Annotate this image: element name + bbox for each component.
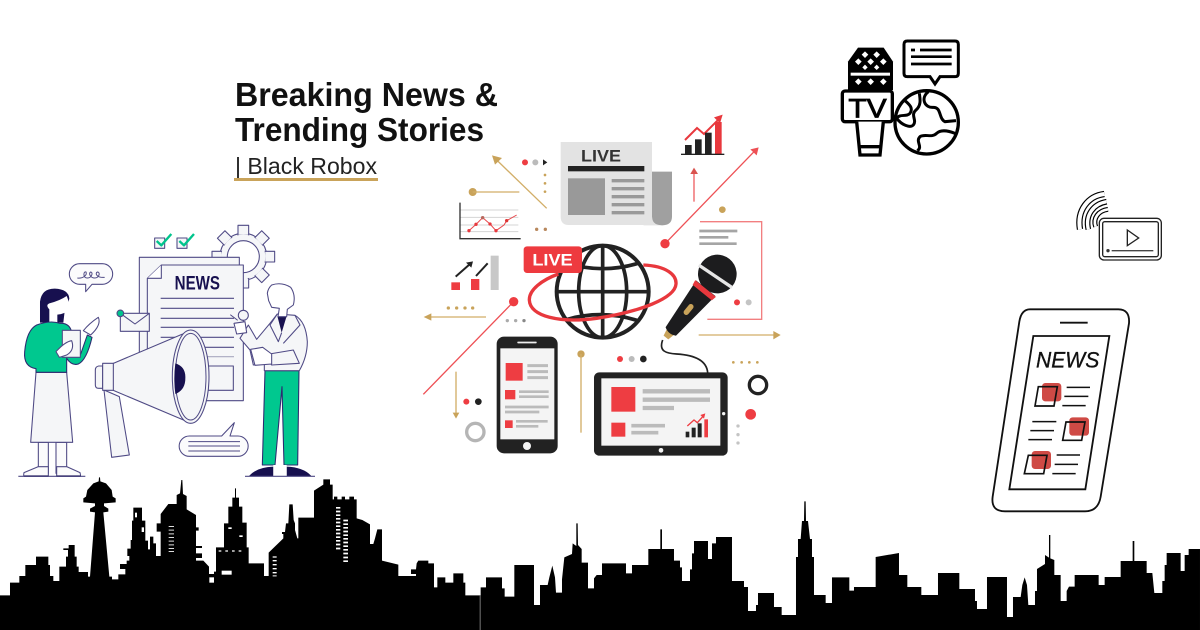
speech bubble bottom bbox=[179, 423, 248, 456]
NEWS heading: NEWS bbox=[175, 274, 220, 295]
skyline seam bbox=[480, 595, 481, 630]
heading line 1: Breaking News & bbox=[235, 76, 498, 113]
icon: smartphone with news bbox=[992, 309, 1129, 511]
line chart bbox=[460, 203, 521, 239]
icon: mic head bbox=[848, 48, 893, 90]
connector arrows and dots bbox=[423, 147, 781, 445]
icon: globe with red orbit bbox=[529, 246, 676, 338]
icon: gear bbox=[212, 225, 275, 288]
icon: small trend arrows bbox=[451, 256, 499, 290]
icon: megaphone bbox=[95, 330, 209, 457]
phone speaker bbox=[1060, 320, 1088, 325]
skyline windows bbox=[135, 507, 348, 583]
back document bbox=[139, 257, 239, 391]
microphone cable bbox=[661, 340, 708, 373]
NEWS headline: NEWS bbox=[1036, 348, 1100, 373]
icon: globe bbox=[895, 91, 958, 154]
news document bbox=[147, 265, 243, 401]
document outline with text lines bbox=[699, 222, 762, 319]
speech bubble top bbox=[69, 264, 113, 292]
icon: TV microphone, speech bubble and globe bbox=[842, 41, 958, 155]
phone device bbox=[497, 337, 558, 453]
title block bbox=[234, 76, 498, 181]
signal arcs bbox=[1079, 194, 1108, 229]
tablet device bbox=[594, 372, 728, 456]
subtitle underline bbox=[234, 178, 378, 181]
phone screen bbox=[1009, 336, 1109, 489]
icon: wireless video player bbox=[1079, 194, 1161, 260]
illustration: news team with megaphone bbox=[18, 225, 315, 477]
subtitle: | Black Robox bbox=[235, 153, 377, 179]
LIVE badge: LIVE bbox=[532, 251, 573, 270]
news item 1 bbox=[1035, 383, 1090, 406]
figure: man with microphone bbox=[231, 284, 315, 476]
LIVE masthead: LIVE bbox=[581, 146, 621, 165]
city skyline silhouette bbox=[0, 477, 1200, 630]
panel: newspaper bbox=[561, 142, 672, 225]
heading line 2: Trending Stories bbox=[235, 111, 484, 148]
skyline shape bbox=[0, 477, 1200, 630]
phone body bbox=[992, 309, 1129, 511]
video player frame bbox=[1099, 218, 1161, 260]
news item 3 bbox=[1024, 451, 1080, 474]
icon: mic handle bbox=[857, 122, 883, 155]
icon: envelope bbox=[117, 310, 149, 331]
LIVE badge bbox=[524, 246, 582, 273]
icon: check boxes bbox=[155, 234, 194, 248]
icon: speech bubble bbox=[904, 41, 958, 84]
illustration: live news hub bbox=[423, 115, 781, 456]
figure: woman bbox=[18, 289, 99, 477]
icon: bar chart with rising arrow bbox=[681, 115, 724, 155]
icon: microphone bbox=[650, 246, 745, 350]
news item 2 bbox=[1028, 417, 1089, 440]
icon: TV label box: TV bbox=[848, 93, 887, 123]
